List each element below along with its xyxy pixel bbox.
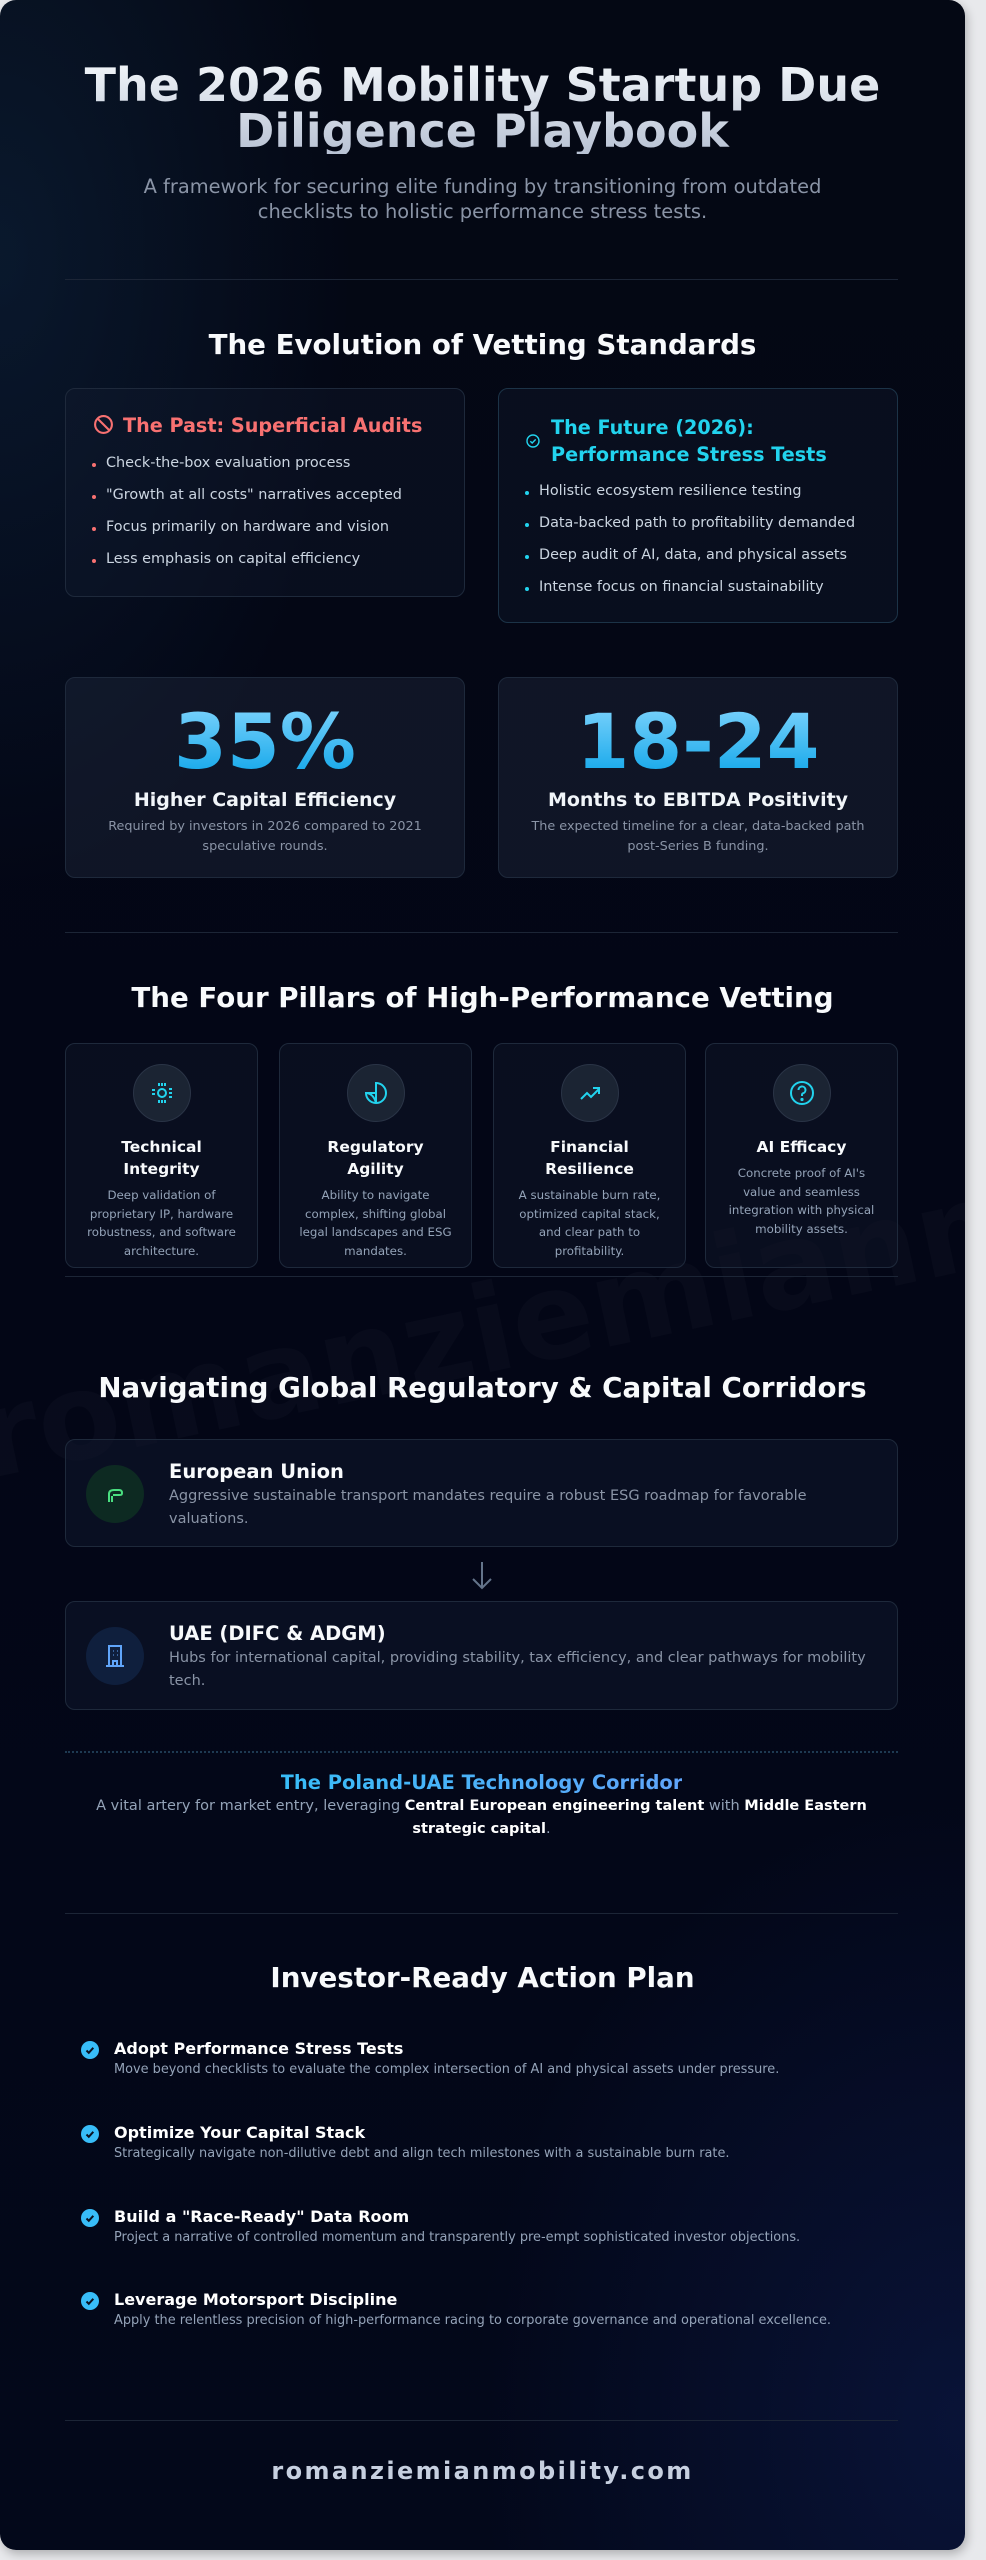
infographic card: Apply the relentless precision of high-performance racing to corporate governance and operational excellence. <box>114 2313 831 2328</box>
past list: Less emphasis on capital efficiency <box>106 551 360 567</box>
stat: 18-24: Months to EBITDA Positivity <box>548 789 848 811</box>
pillar: ai: Concrete proof of AI's value and seamless integration with physical mobility assets. <box>729 1166 874 1236</box>
panel: UAE: Hubs for international capital, providing stability, tax efficiency, and clear pathways for mobility tech. <box>169 1650 866 1689</box>
infographic card: Move beyond checklists to evaluate the complex intersection of AI and physical assets under pressure. <box>114 2062 779 2077</box>
past list <box>92 455 402 567</box>
pillar: technical: Integrity <box>123 1160 200 1178</box>
stat: 18-24: The expected timeline for a clear, data-backed path <box>531 819 865 834</box>
corridor callout <box>96 1771 867 1837</box>
future heading <box>526 416 827 466</box>
heading: pillars: The Four Pillars of High-Performance Vetting <box>131 981 834 1014</box>
pillar: ai <box>705 1043 898 1268</box>
future heading: Performance Stress Tests <box>551 443 827 466</box>
heading: corridors: Navigating Global Regulatory & Capital Corridors <box>98 1371 867 1404</box>
stat: 35% <box>65 677 465 878</box>
corridor callout: A vital artery for market entry, leveraging Central European engineering talent with Middle Eastern <box>96 1798 867 1814</box>
past list: Focus primarily on hardware and vision <box>106 519 389 535</box>
action item 1 <box>81 2039 779 2077</box>
pillar: financial: Financial <box>550 1138 629 1156</box>
pillar: regulatory: Agility <box>347 1160 404 1178</box>
corridor callout: strategic capital. <box>412 1821 551 1837</box>
pillar: financial: Resilience <box>545 1160 634 1178</box>
pillar: ai: AI Efficacy <box>756 1138 846 1156</box>
title: Diligence Playbook <box>236 104 729 158</box>
action item 2 <box>81 2123 729 2161</box>
pillar: financial <box>493 1043 686 1268</box>
icon: question <box>772 1064 830 1122</box>
infographic card: Project a narrative of controlled momentum and transparently pre-empt sophisticated investor objections. <box>114 2230 800 2245</box>
past list: Check-the-box evaluation process <box>106 455 350 471</box>
panel: EU: European Union <box>169 1460 344 1483</box>
pillar: financial: A sustainable burn rate, optimized capital stack, and clear path to profitability. <box>519 1188 660 1258</box>
future heading: The Future (2026): <box>551 416 754 439</box>
icon: trend <box>560 1064 618 1122</box>
heading: evolution: The Evolution of Vetting Standards <box>209 328 756 361</box>
infographic card: Adopt Performance Stress Tests <box>114 2039 403 2058</box>
infographic card: Leverage Motorsport Discipline <box>114 2290 397 2309</box>
future list: Deep audit of AI, data, and physical assets <box>539 547 847 563</box>
heading: action plan: Investor-Ready Action Plan <box>270 1961 695 1994</box>
future list: Intense focus on financial sustainability <box>539 579 824 595</box>
subtitle: A framework for securing elite funding by transitioning from outdated <box>144 175 821 198</box>
panel: UAE: UAE (DIFC & ADGM) <box>169 1622 386 1645</box>
title <box>0 62 965 154</box>
footer url: romanziemianmobility.com <box>271 2457 694 2485</box>
action item 4 <box>81 2290 831 2328</box>
future list: Data-backed path to profitability demanded <box>539 515 855 531</box>
pillar: technical: Deep validation of proprietary IP, hardware robustness, and software architecture. <box>87 1188 236 1258</box>
panel: EU <box>65 1439 898 1547</box>
stat: 35%: speculative rounds. <box>202 839 328 854</box>
past heading: The Past: Superficial Audits <box>123 414 422 437</box>
future list <box>525 483 855 595</box>
panel: EU: Aggressive sustainable transport mandates require a robust ESG roadmap for favorable valuations. <box>169 1488 807 1527</box>
pillar: technical <box>65 1043 258 1268</box>
stat: 35%: Required by investors in 2026 compared to 2021 <box>108 819 422 834</box>
infographic card: Strategically navigate non-dilutive debt and align tech milestones with a sustainable burn rate. <box>114 2146 729 2161</box>
dashed divider <box>65 1751 898 1753</box>
icon: building <box>86 1627 144 1685</box>
stat: 35%: 35% <box>174 697 356 786</box>
action item 3 <box>81 2207 800 2245</box>
panel: future <box>498 388 898 623</box>
subtitle: checklists to holistic performance stress tests. <box>258 200 707 223</box>
icon: leaf <box>86 1465 144 1523</box>
corridor callout: The Poland-UAE Technology Corridor <box>281 1771 682 1794</box>
stat: 18-24 <box>498 677 898 878</box>
future list: Holistic ecosystem resilience testing <box>539 483 802 499</box>
pillar: regulatory: Ability to navigate complex, shifting global legal landscapes and ESG mandates. <box>299 1188 452 1258</box>
stat: 18-24: 18-24 <box>576 697 820 786</box>
pillar: technical: Technical <box>121 1138 202 1156</box>
pillar: regulatory: Regulatory <box>327 1138 424 1156</box>
stat: 18-24: post-Series B funding. <box>627 839 769 854</box>
panel: UAE <box>65 1601 898 1710</box>
stat: 35%: Higher Capital Efficiency <box>134 789 396 811</box>
icon: globe <box>346 1064 404 1122</box>
pillar: regulatory <box>279 1043 472 1268</box>
panel: past <box>65 388 465 597</box>
infographic card: Optimize Your Capital Stack <box>114 2123 365 2142</box>
icon: chip <box>132 1064 190 1122</box>
subtitle <box>144 175 821 223</box>
infographic card: Build a "Race-Ready" Data Room <box>114 2207 409 2226</box>
past list: "Growth at all costs" narratives accepted <box>106 487 402 503</box>
arrow <box>472 1562 492 1590</box>
title: The 2026 Mobility Startup Due <box>85 58 880 112</box>
